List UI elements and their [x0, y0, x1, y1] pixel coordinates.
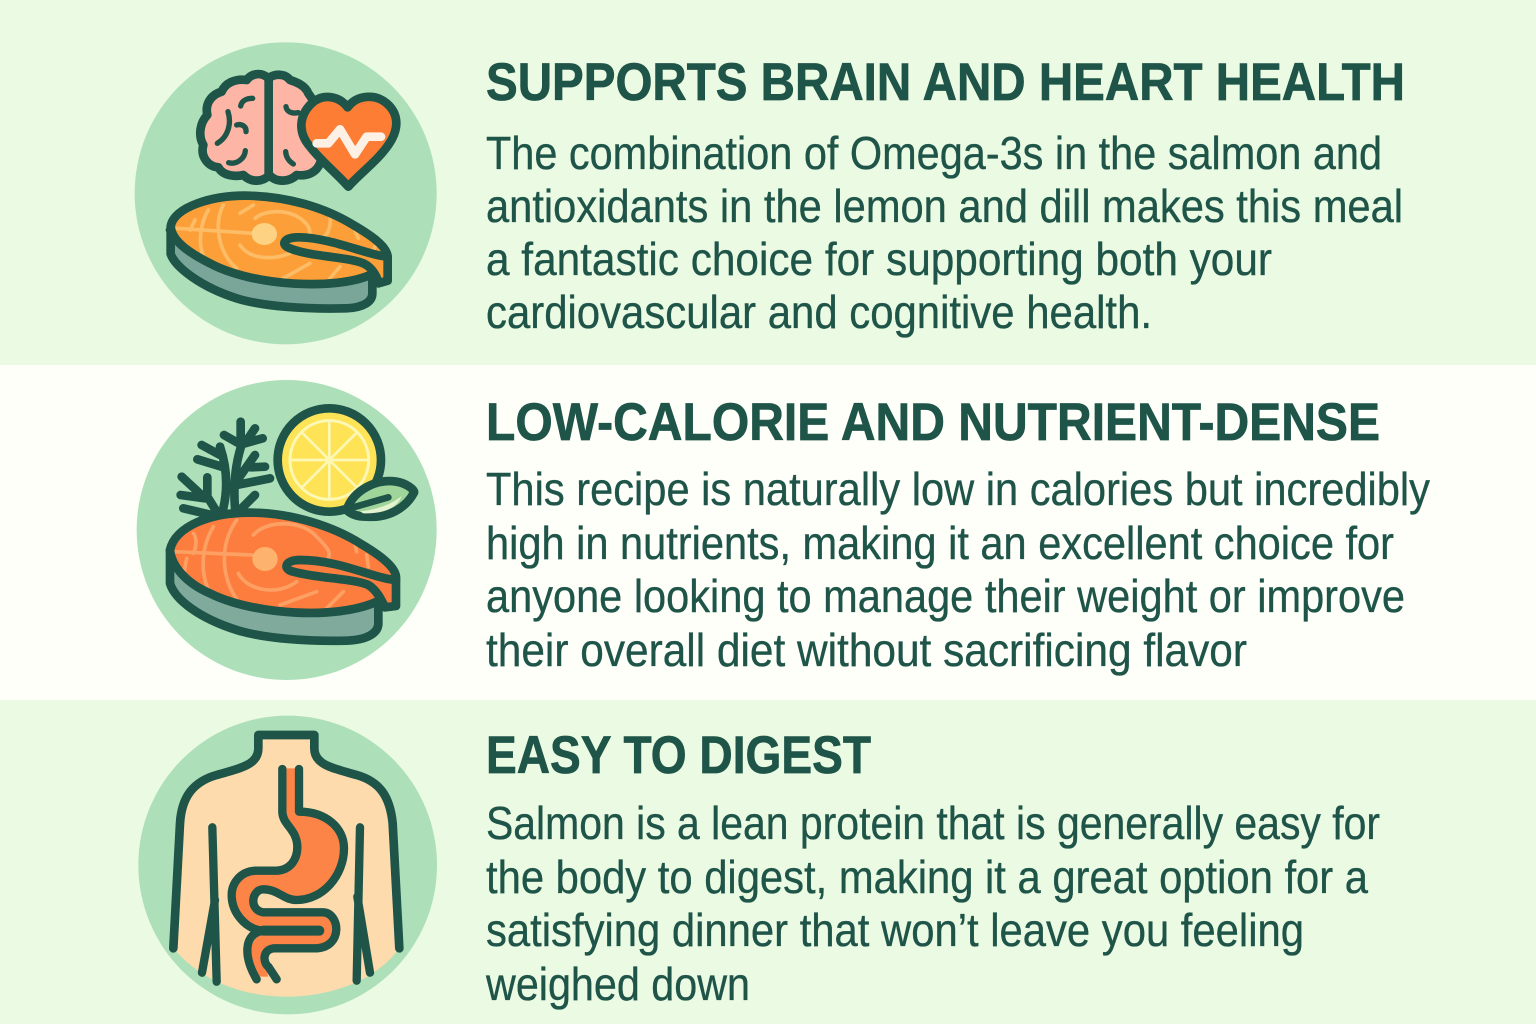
icon: dill sprig — [181, 422, 270, 515]
section 3 body: satisfying dinner that won’t leave you feeling — [486, 904, 1304, 956]
section 1 body: a fantastic choice for supporting both your — [486, 233, 1272, 285]
section 3 body: the body to digest, making it a great option for a — [486, 851, 1368, 903]
icon: brain — [200, 74, 333, 181]
icon: salmon steak — [170, 513, 396, 641]
torso — [173, 735, 399, 997]
section 1 heading: SUPPORTS BRAIN AND HEART HEALTH — [486, 53, 1405, 112]
icon: salmon steak, dill and lemon — [137, 380, 437, 680]
section 1 body — [486, 127, 1403, 338]
section 2 body: anyone looking to manage their weight or improve — [486, 570, 1405, 622]
salmon flesh lines — [175, 520, 368, 610]
icon: leaf — [347, 481, 414, 517]
section 2 body — [486, 463, 1430, 676]
icon: heart with pulse — [301, 97, 396, 187]
section 3 body: Salmon is a lean protein that is generally easy for — [486, 797, 1380, 849]
section 1 body: The combination of Omega-3s in the salmon and — [486, 127, 1382, 179]
section 3 body — [485, 797, 1380, 1010]
section 2 body: their overall diet without sacrificing flavor — [486, 624, 1247, 676]
arm creases — [202, 827, 370, 982]
section 1 body: antioxidants in the lemon and dill makes this meal — [486, 180, 1403, 232]
section 2 body: high in nutrients, making it an excellent choice for — [486, 517, 1394, 569]
section 1 body: cardiovascular and cognitive health. — [486, 286, 1152, 338]
section 3 body: weighed down — [485, 958, 750, 1010]
stomach and intestines — [232, 768, 344, 979]
section 2 body: This recipe is naturally low in calories but incredibly — [486, 463, 1430, 515]
section 3 heading: EASY TO DIGEST — [486, 726, 871, 785]
icon: brain, heart and salmon steak — [135, 42, 437, 344]
salmon flesh lines — [177, 205, 375, 278]
icon: torso with digestive system — [138, 716, 437, 1014]
section 2 heading: LOW-CALORIE AND NUTRIENT-DENSE — [486, 393, 1380, 452]
icon: salmon steak — [170, 196, 388, 309]
icon: lemon slice — [278, 408, 381, 512]
